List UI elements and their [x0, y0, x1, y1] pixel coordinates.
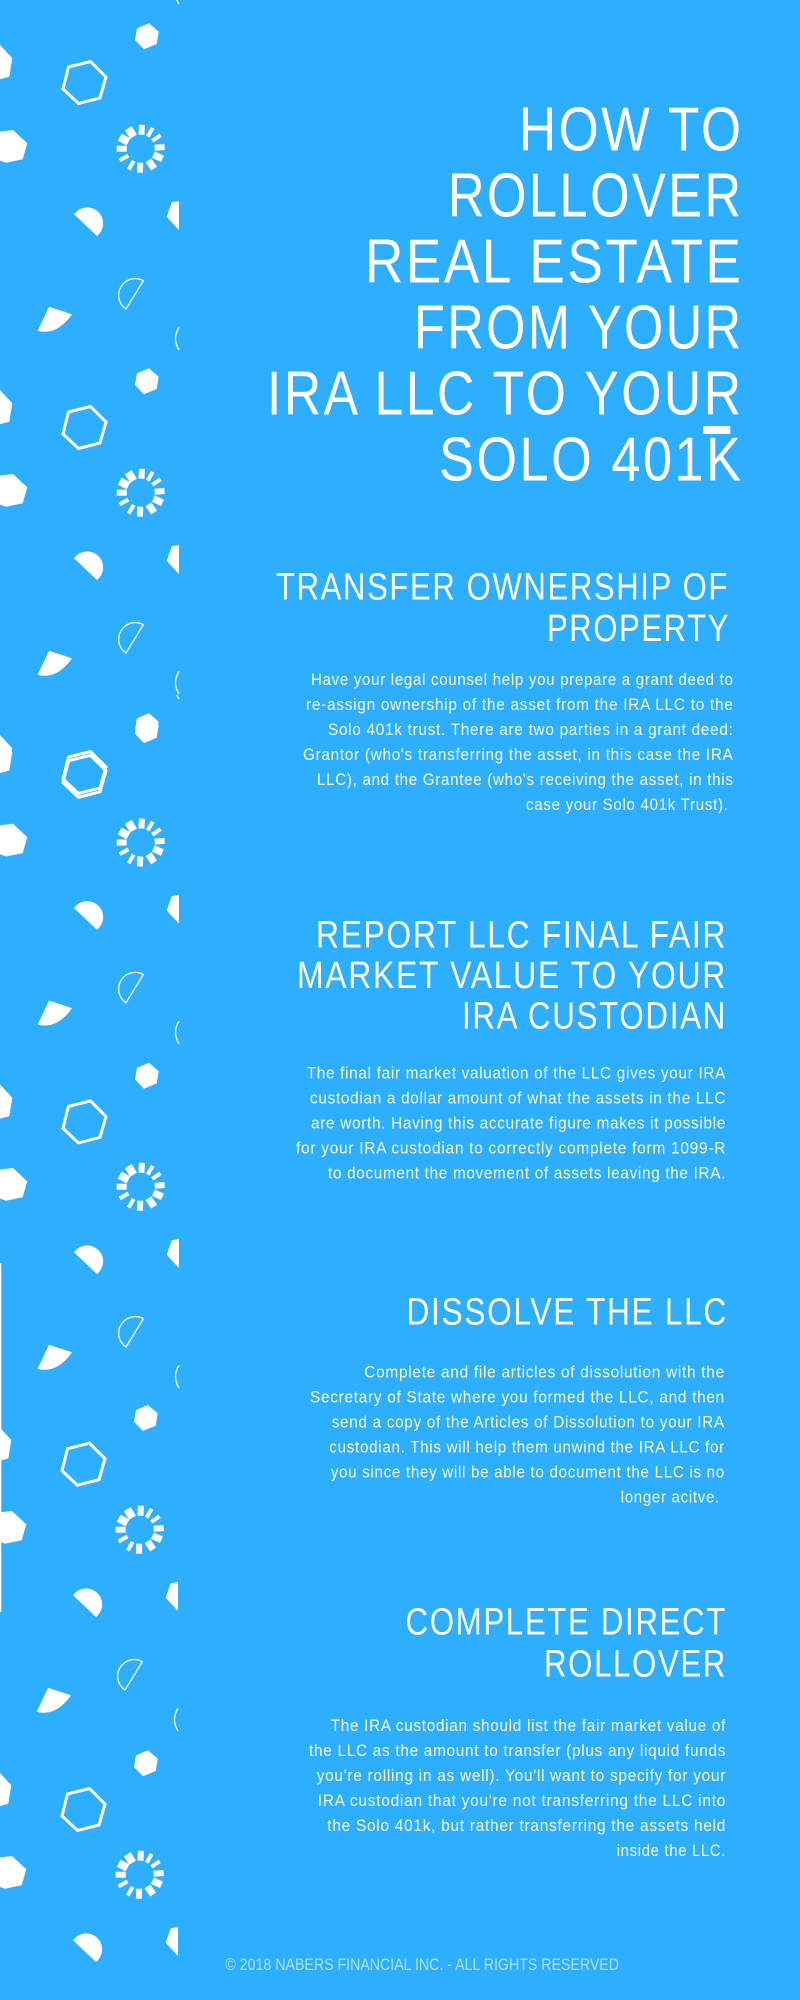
body text: dissolve: longer acitve. — [621, 1488, 720, 1507]
body text: direct rollover: The IRA custodian should list the fair market value of — [331, 1716, 726, 1735]
left edge line — [0, 1263, 1, 1612]
body text: direct rollover — [309, 1716, 726, 1860]
shapes tile 1 — [0, 0, 179, 350]
body text: transfer ownership: Have your legal counsel help you prepare a grant deed to — [311, 670, 734, 689]
title: ROLLOVER — [448, 161, 744, 230]
heading: transfer ownership — [276, 567, 730, 650]
body text: report LLC value: to document the movement of assets leaving the IRA. — [328, 1163, 726, 1182]
heading: direct rollover — [406, 1602, 727, 1685]
body text: transfer ownership: Grantor (who's transferring the asset, in this case the IRA — [303, 745, 734, 764]
body text: transfer ownership: LLC), and the Grantee (who's receiving the asset, in this — [317, 770, 734, 789]
heading: report LLC value: REPORT LLC FINAL FAIR — [316, 914, 727, 956]
body text: direct rollover: you're rolling in as well). You'll want to specify for your — [317, 1766, 726, 1785]
title: SOLO 401K — [439, 426, 744, 495]
body text: dissolve: Complete and file articles of dissolution with the — [364, 1363, 725, 1382]
body text: direct rollover: the Solo 401k, but rather transferring the assets held — [327, 1816, 726, 1835]
heading: transfer ownership: PROPERTY — [547, 608, 730, 650]
body text: report LLC value: custodian a dollar amount of what the assets in the LLC — [310, 1088, 726, 1107]
body text: direct rollover: IRA custodian that you're not transferring the LLC into — [318, 1791, 726, 1810]
heading: report LLC value: IRA CUSTODIAN — [462, 996, 727, 1038]
body text: report LLC value — [296, 1063, 726, 1182]
body text: transfer ownership: case your Solo 401k Trust). — [526, 795, 729, 814]
heading: report LLC value: MARKET VALUE TO YOUR — [297, 955, 727, 997]
body text: transfer ownership: re-assign ownership of the asset from the IRA LLC to the — [306, 695, 734, 714]
title: HOW TO — [519, 95, 744, 164]
section 4: complete direct rollover — [309, 1602, 727, 1860]
body text: dissolve: Secretary of State where you formed the LLC, and then — [310, 1388, 725, 1407]
section 3: dissolve the LLC — [310, 1292, 728, 1507]
shapes tile 5 — [0, 1405, 178, 1731]
shapes tile 3 — [0, 695, 179, 1044]
pattern shapes column — [0, 0, 179, 2000]
title — [267, 95, 744, 495]
shapes tile 2 — [0, 368, 179, 694]
shapes tile 4 — [0, 1063, 179, 1388]
body text: dissolve — [310, 1363, 725, 1507]
body text: dissolve: custodian. This will help them unwind the IRA LLC for — [329, 1438, 725, 1457]
body text: report LLC value: for your IRA custodian to correctly complete form 1099-R — [296, 1138, 726, 1157]
heading: direct rollover: COMPLETE DIRECT — [406, 1602, 727, 1644]
heading: dissolve: DISSOLVE THE LLC — [406, 1292, 728, 1334]
body text: dissolve: send a copy of the Articles of Dissolution to your IRA — [332, 1413, 725, 1432]
body text: report LLC value: are worth. Having this accurate figure makes it possible — [311, 1113, 726, 1132]
section 1: transfer ownership of property — [276, 567, 734, 814]
body text: direct rollover: inside the LLC. — [617, 1841, 726, 1860]
footer copyright: © 2018 NABERS FINANCIAL INC. - ALL RIGHTS RESERVED — [225, 1955, 619, 1974]
body text: dissolve: you since they will be able to document the LLC is no — [331, 1463, 725, 1482]
body text: transfer ownership: Solo 401k trust. There are two parties in a grant deed: — [328, 720, 734, 739]
body text: direct rollover: the LLC as the amount to transfer (plus any liquid funds — [309, 1741, 726, 1760]
body text: report LLC value: The final fair market valuation of the LLC gives your IRA — [307, 1063, 726, 1082]
shapes tile 6 — [0, 1750, 178, 2000]
section 2: report LLC final fair market value — [296, 914, 727, 1182]
body text: transfer ownership — [303, 670, 734, 814]
heading: report LLC value — [297, 914, 727, 1038]
heading: direct rollover: ROLLOVER — [544, 1643, 727, 1685]
title: REAL ESTATE — [365, 228, 744, 296]
